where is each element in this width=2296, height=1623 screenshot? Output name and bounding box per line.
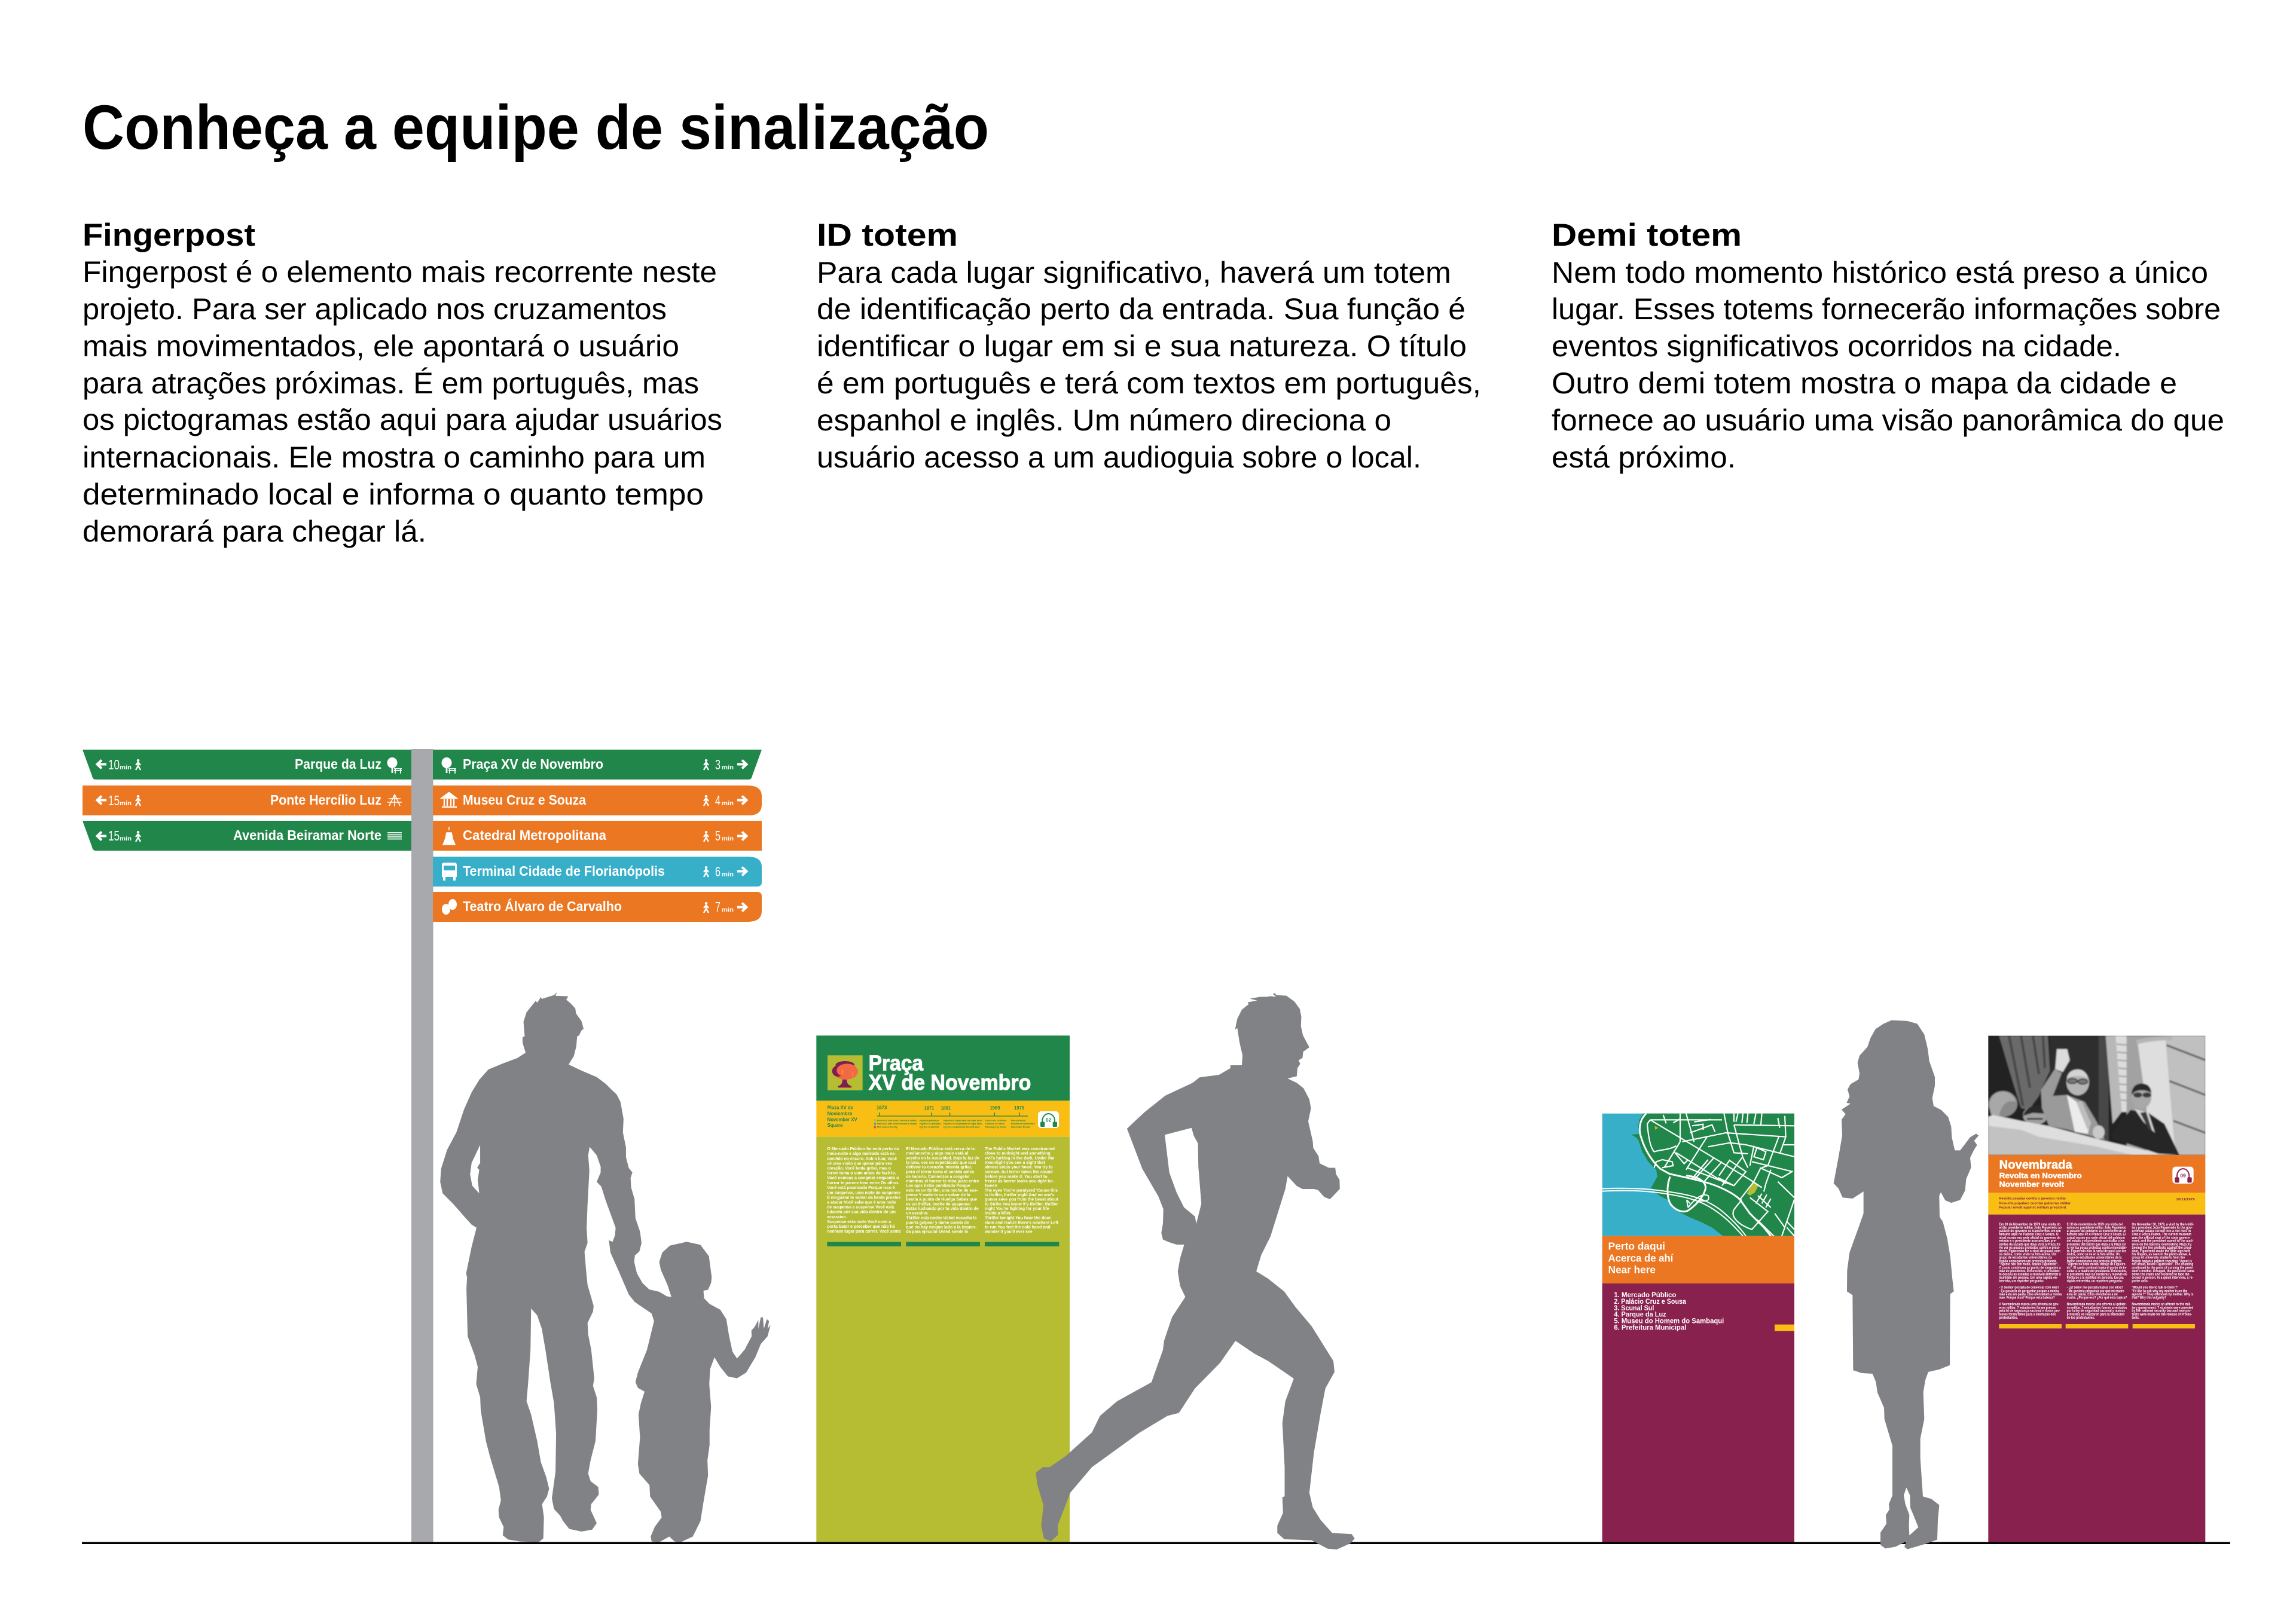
text column: Portuguese: vê uma visão que quase pára seu: [827, 1160, 893, 1166]
translated names: Noviembre: [828, 1111, 853, 1116]
timeline: Figueira é replantada no lugar atual: [944, 1119, 982, 1121]
timeline: Drawings by Irânio: [985, 1126, 1006, 1129]
text column: English: crowd in person. In a quick interview, a re-: [2132, 1276, 2193, 1280]
text column: Portuguese: erno militar. 7 estudantes foram presos: [1999, 1306, 2056, 1310]
text column: Portuguese: O Mercado Público foi está perto da: [827, 1146, 899, 1151]
timeline: 1979: [1014, 1105, 1025, 1111]
text column: Spanish: grupo de estudiantes universitarios de la: [2067, 1257, 2122, 1260]
text column: Spanish: - ¿El Señor me gustaría hablar con ellos?: [2067, 1286, 2123, 1290]
text column: Spanish: acecho en la oscuridad. Bajo la luz de: [906, 1155, 979, 1160]
text column: Spanish: protestas se realizaron para la liberación: [2067, 1313, 2125, 1316]
purple panel: [1602, 1283, 1794, 1542]
text column: English: freeze as horror looks you right be-: [985, 1178, 1054, 1184]
heading: near here: Acerca de ahí: [1608, 1252, 1674, 1264]
sign: Museu Cruz e Souza: 4: [715, 793, 720, 808]
text column: English: porter asks:: [2132, 1280, 2148, 1283]
yellow marker: [1775, 1325, 1794, 1331]
text column: Spanish: un asesino.: [906, 1211, 929, 1216]
text block: Fingerpost: mais movimentados, ele apontará o usuário: [83, 329, 679, 363]
text column: Portuguese: - O Senhor gostaria de conversar com eles?: [1999, 1286, 2059, 1290]
totem title: Praça: [869, 1051, 924, 1075]
timeline: 1673: [877, 1105, 887, 1111]
text column: Spanish: de hacerlo. Comienzas a congelar: [906, 1173, 970, 1179]
column end bars: [1999, 1324, 2195, 1328]
text column: Portuguese: horror te parece bem entre Os olhos: [827, 1180, 899, 1185]
text column: Portuguese: pela lei de segurança nacional e novos pro-: [1999, 1310, 2060, 1313]
text column: English: wonder if you'll ever see: [984, 1229, 1033, 1234]
ground line: [82, 1542, 2230, 1544]
sign: Praça XV de Novembro: 3: [715, 757, 720, 772]
text column: Spanish: madre. ¿Porque eso? ¿Por qué esta bajeza?: [2067, 1296, 2127, 1300]
text block: ID totem: de identificação perto da entrada. Sua função é: [817, 292, 1465, 326]
sign: Teatro Álvaro de Carvalho: 7: [715, 899, 720, 915]
sign: Museu Cruz e Souza: Museu Cruz e Souza: [463, 792, 586, 808]
text column: English: [984, 1146, 1058, 1234]
text column: Spanish: que no hay ningún lado a la izquier-: [906, 1224, 977, 1230]
timeline: Fig tree is planted: [920, 1126, 939, 1129]
text column: Spanish: El Mercado Público está cerca de la: [906, 1146, 975, 1151]
fingerpost sign: [83, 749, 762, 1544]
text column: Spanish: Al ver las pocas protestas contra el presiden-: [2067, 1246, 2127, 1250]
text column: Portuguese: Suspense esta noite Você ouve a: [827, 1219, 891, 1224]
text column: Spanish: puerta golpear y darse cuenta de: [906, 1219, 969, 1225]
text block: Demi totem: lugar. Esses totems fornecerão informações sobre: [1552, 292, 2221, 326]
text column: English: gonna save you from the beast about: [985, 1197, 1058, 1202]
sign: Avenida Beiramar Norte: 15: [108, 828, 120, 843]
text column: Portuguese: Em 30 de Novembro de 1979 uma visita do: [1999, 1223, 2060, 1227]
text column: Portuguese: dente, Figueiredo fez o sinal de pouco com: [1999, 1250, 2060, 1254]
yellow band: [1988, 1193, 2205, 1215]
text column: English: ment, and the president waved to the audi-: [2132, 1240, 2193, 1243]
silhouette: runner: [1036, 993, 1355, 1549]
timeline: Francisco Dias Velho nomeia a cidade: [877, 1119, 917, 1121]
heading: Demi totem: Demi totem: [1552, 218, 1742, 253]
text column: English: tary government. 7 students were arrested: [2132, 1306, 2194, 1310]
text column: Portuguese: O canto continuou ao ponto de xingarem a: [1999, 1266, 2061, 1270]
sign: Teatro Álvaro de Carvalho: min: [722, 907, 734, 913]
text column: English: continued to the point of cursing the presi-: [2132, 1266, 2193, 1270]
list of places: 2. Palácio Cruz e Sousa: [1614, 1298, 1686, 1306]
text column: Portuguese: tumulto aqui no Palácio Cruz e Souza. O: [1999, 1233, 2059, 1237]
text block: Fingerpost: demorará para chegar lá.: [83, 515, 426, 548]
text column: Portuguese: Ao ver os poucos protestos contra o presi-: [1999, 1246, 2060, 1250]
text block: Fingerpost: [83, 218, 722, 548]
title: Novembrada: [1999, 1159, 2082, 1188]
orange band: [1988, 1155, 2205, 1193]
text block: Fingerpost: os pictogramas estão aqui para ajudar usuários: [83, 403, 722, 436]
text column: English: dent's mother. Enraged, the president came: [2132, 1270, 2195, 1273]
text column: English: ernment palace turned into a riot here in: [2132, 1230, 2191, 1233]
text block: Fingerpost: determinado local e informa o quanto tempo: [83, 478, 704, 511]
text column: Portuguese: "Agente não tem medo, abaixo Figueiredo".: [1999, 1263, 2059, 1267]
list of places: 3. Scunal Sul: [1614, 1304, 1654, 1312]
text column: Spanish: da para ejecutar Usted siente la: [906, 1229, 969, 1234]
icon: audioguide 09: [2172, 1167, 2194, 1184]
subtitle: [1999, 1197, 2195, 1210]
list of places: 4. Parque da Luz: [1614, 1311, 1666, 1319]
text column: Portuguese: grupo de estudantes universitários da: [1999, 1257, 2052, 1260]
text column: English: region began a protest shouting "Agent is: [2132, 1260, 2193, 1263]
text column: English: tween: [985, 1183, 997, 1188]
silhouette: woman: [1834, 1020, 1979, 1549]
sign: Praça XV de Novembro: [433, 750, 762, 780]
text block: Demi totem: está próximo.: [1552, 441, 1736, 474]
subtitle: Popular revolt against military president: [1999, 1206, 2066, 1210]
text column: Spanish: - Me gustaría preguntar por qué mi madre: [2067, 1289, 2124, 1293]
text column: Spanish: Estás luchando por tu vida dentro de: [906, 1206, 979, 1211]
text column: Portuguese: estado e o presidente acenava aos pre-: [1999, 1240, 2056, 1243]
text column: Portuguese: atual museu era sede oficial do governo do: [1999, 1236, 2060, 1240]
text block: ID totem: espanhol e inglês. Um número direciona o: [817, 404, 1391, 437]
text block: Demi totem: Nem todo momento histórico está preso a único: [1552, 256, 2208, 289]
text column: Spanish: te, Figueiredo hizo la señal de poco con los: [2067, 1250, 2127, 1254]
translated names: November XV: [828, 1117, 857, 1122]
sign: Ponte Hercílio Luz: min: [120, 800, 132, 807]
timeline: November Revolt: [1011, 1126, 1030, 1129]
text column: Spanish: es un thriller, noche de suspenso: [906, 1201, 971, 1206]
sign: Praça XV de Novembro: min: [722, 765, 734, 771]
text column: Spanish: está en pauta. Ellos ofendieron a mi: [2067, 1293, 2118, 1297]
text column: Spanish: tumulto aquí en el Palacio Cruz y Souza. El: [2067, 1233, 2126, 1237]
timeline: Diseños de Irânio: [985, 1123, 1005, 1125]
text column: Spanish: entonces presidente militar João Figueiredo: [2067, 1227, 2126, 1230]
text column: Spanish: El 30 de noviembre de 1979 una visita del: [2067, 1223, 2123, 1227]
text column: Portuguese: sentes da sacada que dava vista à Praça XV.: [1999, 1243, 2061, 1246]
text column: Spanish: detiene tu corazón. Intenta gritar,: [906, 1164, 972, 1170]
text column: English: group of university students from the: [2132, 1257, 2185, 1260]
text block: ID totem: [817, 218, 1481, 474]
text block: ID totem: usuário acesso a um audioguia sobre o local.: [817, 441, 1421, 474]
text column: English: that? Why this vulgarity?: [2132, 1296, 2167, 1300]
text column: Portuguese: porta bater e perceber que não há: [827, 1224, 895, 1229]
text column: Spanish: Los ojos Estás paralizado Porque: [906, 1183, 970, 1188]
text column: English: close to midnight and something: [985, 1151, 1051, 1156]
heading: near here: [1608, 1240, 1674, 1276]
text column: English: ence on the balcony overlooking Plaza XV.: [2132, 1243, 2192, 1246]
text column: Spanish: do". El canto continuó hasta el punto de in-: [2067, 1266, 2127, 1270]
list of places: 6. Prefeitura Municipal: [1614, 1324, 1686, 1332]
text column: English: was the official seat of the state govern-: [2131, 1236, 2190, 1240]
text column: English: dent, Figueiredo made the little sign with: [2132, 1250, 2191, 1254]
title: Novembrada: Novembrada: [1999, 1159, 2073, 1172]
list of places: 1. Mercado Público: [1614, 1291, 1676, 1299]
sign: Praça XV de Novembro: Praça XV de Novembro: [463, 756, 603, 772]
subtitle: 30/11/1979: [2176, 1198, 2195, 1202]
column end bars: [827, 1242, 1059, 1246]
text column: Portuguese: testos foram feitos para a libertação dos: [1999, 1313, 2056, 1316]
list of places: 5. Museu do Homem do Sambaqui: [1614, 1318, 1724, 1325]
sign: Museu Cruz e Souza: [433, 785, 762, 815]
text column: Portuguese: os dedos, como visto na foto acima. Um: [1999, 1253, 2056, 1257]
icon: tree: [828, 1055, 863, 1090]
timeline: Figuera es plantada: [920, 1123, 941, 1125]
sign: Catedral Metropolitana: 5: [715, 828, 720, 843]
text column: Portuguese: meia-noite e algo malvado está es-: [827, 1151, 896, 1156]
text column: English: Seeing the few protests against the presi-: [2132, 1246, 2192, 1250]
sign: Museu Cruz e Souza: min: [722, 800, 734, 807]
ID totem: [816, 1035, 1070, 1543]
text column: Spanish: rápida entrevista, un reportero pregunta:: [2067, 1280, 2123, 1283]
text column: Portuguese: multidão em pessoa. Em uma rápida en-: [1999, 1276, 2058, 1280]
sign: Teatro Álvaro de Carvalho: Teatro Álvaro de Carvalho: [463, 898, 622, 914]
text column: English: On November 30, 1979, a visit by then-mili-: [2132, 1223, 2194, 1227]
sign: Parque da Luz: 10: [108, 757, 120, 772]
timeline: FDV names the city: [877, 1126, 898, 1129]
purple panel: [1988, 1215, 2205, 1543]
text column: Portuguese: lutando por sua vida dentro de um: [827, 1209, 896, 1215]
text column: Portuguese: mãe do presidente. Enfurecido, o presiden-: [1999, 1270, 2060, 1273]
text column: Spanish: Thriller esta noche Usted escucha la: [906, 1215, 977, 1220]
text column: English: his fingers, as seen in the photo above. A: [2132, 1253, 2191, 1257]
sign: Avenida Beiramar Norte: Avenida Beiramar Norte: [233, 827, 381, 843]
text column: English: Thriller tonight You hear the door: [985, 1215, 1051, 1220]
text block: Fingerpost: projeto. Para ser aplicado nos cruzamentos: [83, 292, 667, 326]
text column: Portuguese: de suspense e suspense Você está: [827, 1205, 894, 1210]
text column: English: agenda ?" They offended my mother. Why is: [2132, 1293, 2194, 1297]
text column: English: The Public Market was constructed: [985, 1146, 1055, 1151]
text column: Portuguese: A Novembrada marca uma afronta ao gov-: [1999, 1303, 2059, 1307]
title: Novembrada: November revolt: [1999, 1179, 2065, 1188]
sign: Teatro Álvaro de Carvalho: [433, 892, 762, 922]
title: Novembrada: Revolta en Novembro: [1999, 1171, 2082, 1180]
silhouette: man: [440, 992, 642, 1542]
sign: Parque da Luz: min: [120, 765, 132, 771]
text column: Portuguese: então presidente militar João Figueiredo ao: [1999, 1227, 2062, 1230]
text block: Fingerpost: internacionais. Ele mostra o caminho para um: [83, 441, 706, 474]
text column: English: almost stops your heart. You try to: [985, 1164, 1053, 1170]
text column: Spanish: [906, 1146, 979, 1234]
silhouette: child: [609, 1240, 771, 1542]
text column: Spanish: región comenzaron una protesta gritando: [2067, 1260, 2122, 1263]
text block: ID totem: é em português e terá com textos em português,: [817, 366, 1481, 400]
text column: Portuguese: assassino.: [827, 1214, 847, 1219]
text column: English: to run You feel the cold hand and: [985, 1224, 1051, 1230]
text column: Portuguese: nenhum lugar para correr. Você sente: [827, 1228, 901, 1234]
sign: Avenida Beiramar Norte: min: [120, 836, 132, 842]
heading: ID totem: ID totem: [817, 218, 958, 253]
text column: Portuguese: [827, 1146, 901, 1234]
icon: audioguide 09: 09: [2180, 1172, 2186, 1178]
sign: Catedral Metropolitana: [433, 821, 762, 851]
text column: English: "I'd like to ask why my mother is on the: [2132, 1289, 2188, 1293]
text column: Spanish: Novembrada marca una afrenta al gobier-: [2067, 1303, 2127, 1307]
subtitle: Revuelta populare cuentra gobierno militar: [1999, 1202, 2071, 1205]
post: [411, 749, 433, 1544]
sign: Catedral Metropolitana: min: [722, 836, 734, 842]
demi totem: Novembrada: [1985, 1032, 2208, 1543]
text block: Fingerpost: para atrações próximas. É em português, mas: [83, 366, 699, 400]
text column: English: down the stairs and resolved to face the: [2132, 1273, 2190, 1276]
text column: Spanish: al palacio del gobierno se transformó en un: [2067, 1230, 2126, 1233]
sign: Ponte Hercílio Luz: [83, 785, 411, 815]
sign: Terminal Cidade de Florianópolis: Terminal Cidade de Florianópolis: [463, 863, 665, 879]
text column: Portuguese: [1999, 1223, 2062, 1320]
text column: Spanish: actual museo era sede oficial del gobierno: [2067, 1236, 2125, 1240]
text column: English: by the national security law and new pro-: [2132, 1310, 2191, 1313]
text column: Portuguese: terror toma o som antes de fazê-lo.: [827, 1170, 896, 1176]
demi totem: map: [1602, 1114, 1794, 1542]
timeline: Figueira plantada: [920, 1119, 939, 1121]
text column: English: The eyes You're paralyzed 'Cause this: [985, 1187, 1058, 1193]
totem panels: [816, 1035, 1070, 1543]
text column: Spanish: mientras el horror te mira justo entre: [906, 1178, 979, 1184]
sign: Parque da Luz: Parque da Luz: [295, 756, 381, 772]
text column: Spanish: "Agente no tiene miedo, debajo de Figueire-: [2067, 1263, 2126, 1267]
title: Conheça a equipe de sinalização: [83, 93, 989, 163]
text block: ID totem: Para cada lugar significativo, haverá um totem: [817, 256, 1451, 289]
text column: Portuguese: trevista, um repórter pergunta:: [1999, 1280, 2044, 1283]
text column: Portuguese: palácio do governo se transformou em um: [1999, 1230, 2061, 1233]
translated names: [828, 1105, 857, 1128]
text column: English: not afraid, below Figueiredo". The chanting: [2132, 1263, 2194, 1267]
text column: Spanish: la luna, ves un espectáculo que casi: [906, 1160, 976, 1165]
heading: near here: Near here: [1608, 1264, 1656, 1276]
timeline: Desenhos de Irânio: [985, 1119, 1007, 1121]
text column: Spanish: sultar a la madre del presidente. Enfurecido,: [2067, 1270, 2127, 1273]
text column: English: is thriller, thriller night And no one's: [985, 1192, 1054, 1197]
sign: Terminal Cidade de Florianópolis: [433, 857, 762, 887]
text column: Portuguese: Você começa a congelar enquanto o: [827, 1175, 899, 1181]
translated names: Square: [828, 1123, 843, 1128]
timeline: Revolta en Noviembre: [1011, 1123, 1035, 1125]
heading: Fingerpost: Fingerpost: [83, 218, 255, 253]
text column: Portuguese: Você está paralisado Porque isso é: [827, 1185, 895, 1190]
text column: Portuguese: mae. Porque isso? Porque esta baixeza?: [1999, 1296, 2055, 1300]
text block: Demi totem: eventos significativos ocorridos na cidade.: [1552, 329, 2121, 363]
timeline: Francisco Dias Velho nomeia la ciudad: [877, 1123, 917, 1125]
text column: English: [2131, 1223, 2195, 1320]
text column: Portuguese: região começaram um protesto gritando: [1999, 1260, 2057, 1263]
text column: Spanish: medianoche y algo malo está al: [906, 1151, 968, 1156]
sign: Terminal Cidade de Florianópolis: 6: [715, 864, 720, 879]
text column: English: moonlight you see a sight that: [985, 1160, 1045, 1165]
text block: Fingerpost: Fingerpost é o elemento mais recorrente neste: [83, 255, 717, 289]
text column: Portuguese: condido no escuro. Sob o luar, você: [827, 1156, 897, 1161]
text column: Portuguese: um suspense, uma noite de suspense: [827, 1190, 900, 1195]
text column: English: before you make it. You start to: [985, 1173, 1048, 1179]
text column: Spanish: el presidente bajó las escaleras y resolvió en-: [2067, 1273, 2127, 1276]
text column: English: evil's lurking in the dark. Under the: [985, 1155, 1054, 1160]
text column: Spanish: frentarse a la multitud en persona. En una: [2067, 1276, 2124, 1280]
text column: Spanish: presentes del balcón que daba a la Plaza XV.: [2067, 1243, 2126, 1246]
totem title: XV de Novembro: [869, 1070, 1031, 1095]
subtitle: Revolta popular contra o governo militar: [1999, 1197, 2066, 1201]
text column: Spanish: esto es un thriller, una noche de sus-: [906, 1187, 978, 1193]
text column: Spanish: del estado y el presidente acentuaba a los: [2067, 1240, 2125, 1243]
text column: Spanish: de los protestantes.: [2067, 1316, 2095, 1320]
text column: English: scream, but terror takes the sound: [985, 1169, 1053, 1175]
text column: English: tests were made for the release of Protes-: [2132, 1313, 2192, 1316]
text column: Portuguese: protestantes.: [1999, 1316, 2018, 1320]
heading: near here: Perto daqui: [1608, 1240, 1665, 1252]
sign: Terminal Cidade de Florianópolis: min: [722, 872, 734, 878]
text column: Spanish: pero el terror toma el sonido antes: [906, 1169, 974, 1175]
text column: Portuguese: E ninguémi te salvar da besta prestes: [827, 1194, 900, 1200]
text column: Portuguese: te desceu as escadas e resolveu enfrentar a: [1999, 1273, 2061, 1276]
photo: balcony: [1985, 1032, 2208, 1160]
map: [1602, 1114, 1794, 1236]
text column: Portuguese: - Eu gostaria de perguntar porque a minha: [1999, 1289, 2059, 1293]
timeline: 1969: [990, 1105, 1000, 1111]
text column: English: night You're fighting for your life: [985, 1206, 1049, 1211]
timeline: 1891: [941, 1106, 951, 1111]
text column: English: tary president João Figueiredo to the gov-: [2132, 1227, 2193, 1230]
text block: ID totem: identificar o lugar em si e sua natureza. O título: [817, 329, 1467, 363]
timeline: Figuera es replantada en lugar atual: [944, 1123, 982, 1125]
text column: Spanish: [2067, 1223, 2127, 1320]
text column: Spanish: no militar. 7 estudiantes fueron arrestados: [2067, 1306, 2127, 1310]
sign: Ponte Hercílio Luz: Ponte Hercílio Luz: [270, 792, 381, 808]
timeline: Novembrada: [1011, 1119, 1026, 1121]
text column: English: slam and realize there's nowhere Left: [985, 1219, 1058, 1225]
icon: audioguide 02: 02: [1046, 1117, 1052, 1123]
list of places: [1614, 1291, 1724, 1332]
text column: Spanish: bestia a punto de Huelga Sabes que: [906, 1197, 977, 1202]
sign: Ponte Hercílio Luz: 15: [108, 793, 120, 808]
text column: Spanish: pense Y nadie te va a salvar de la: [906, 1192, 970, 1197]
totem title: [869, 1051, 1031, 1095]
sign: Parque da Luz: [83, 750, 411, 780]
text column: English: tants.: [2132, 1316, 2140, 1320]
text block: Demi totem: Outro demi totem mostra o mapa da cidade e: [1552, 366, 2177, 400]
text block: Demi totem: [1552, 218, 2224, 474]
text column: Spanish: dedos, como se ve en la foto arriba. Un: [2067, 1253, 2120, 1257]
translated names: Plaza XV de: [828, 1105, 854, 1110]
text column: English: inside a killer.: [985, 1211, 1012, 1216]
text column: Portuguese: mãe está em pauta. Eles ofenderam a minha: [1999, 1293, 2062, 1297]
text column: English: Novembrada marks an affront to the mili-: [2132, 1303, 2191, 1307]
icon: audioguide 02: [1038, 1111, 1059, 1128]
text column: Spanish: por la ley de seguridad nacional y nuevas: [2067, 1310, 2126, 1313]
text column: Portuguese: a atacar Você sabe que é uma noite: [827, 1199, 896, 1205]
timeline: [874, 1105, 1035, 1129]
orange band: [1602, 1236, 1794, 1283]
text column: English: to Strike You know it's thriller, thriller: [985, 1201, 1058, 1206]
text column: English: Cruz e Souza Palace. The current museum: [2132, 1233, 2191, 1237]
text column: English: "Would you like to talk to them ?": [2132, 1286, 2178, 1290]
sign: Catedral Metropolitana: Catedral Metropolitana: [463, 827, 606, 843]
timeline: Fig tree replanted at present spot: [944, 1126, 980, 1129]
text column: Portuguese: coração. Você tenta gritar, mas o: [827, 1166, 891, 1171]
timeline: 1871: [924, 1106, 935, 1111]
text block: Demi totem: fornece ao usuário uma visão panorâmica do que: [1552, 404, 2224, 437]
sign: Avenida Beiramar Norte: [83, 821, 411, 851]
